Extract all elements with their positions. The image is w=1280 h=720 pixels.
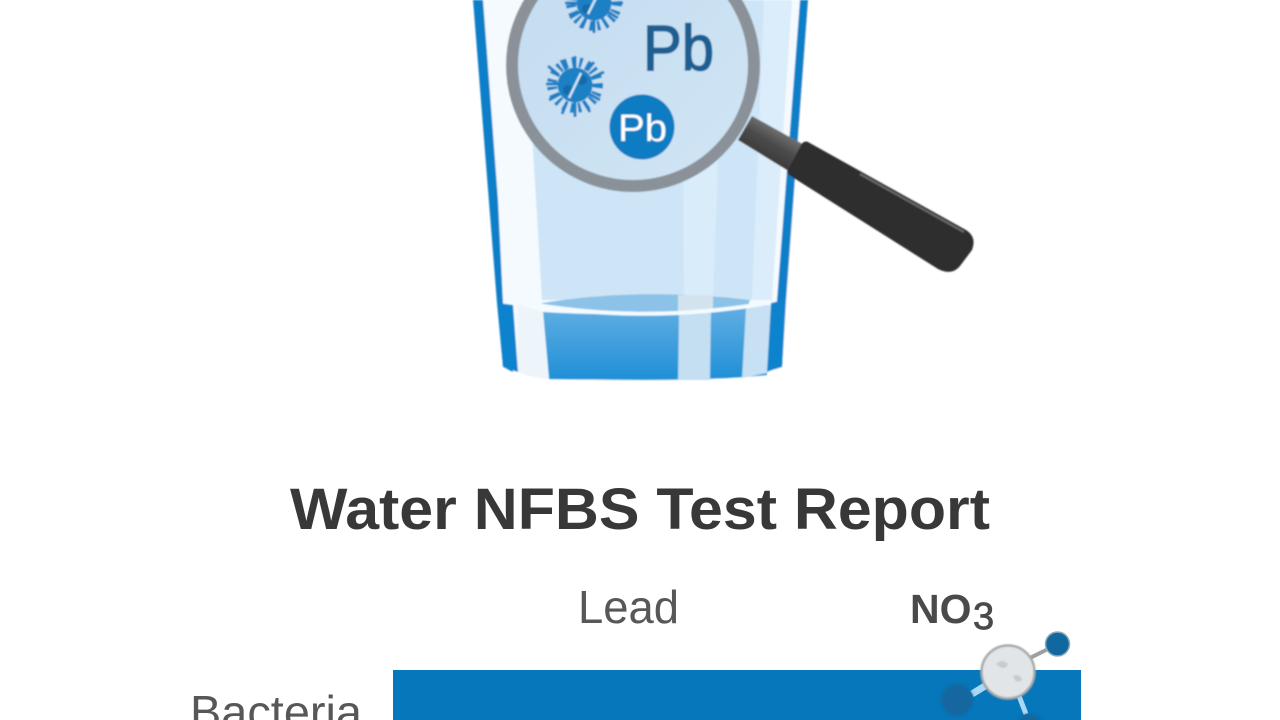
label: NO3: 3	[973, 596, 994, 638]
water surface	[542, 294, 750, 312]
illustration: glass of water with magnifying glass	[473, 0, 974, 381]
icon: bacterium upper	[565, 0, 623, 33]
left glass edge	[473, 0, 513, 372]
lens contents: Pb symbol dark: Pb	[643, 12, 714, 84]
central atom	[982, 646, 1034, 698]
icon: NO3 molecule	[941, 632, 1070, 720]
handle grip	[788, 142, 974, 272]
right glass edge	[772, 0, 808, 370]
handle sheen	[860, 174, 964, 232]
icon: bacterium lower	[546, 56, 604, 117]
label: NO3	[910, 586, 994, 638]
water body	[543, 305, 767, 380]
label: NO3: NO	[910, 586, 972, 632]
glass	[473, 0, 808, 381]
label: Lead: Lead	[578, 581, 679, 633]
glass highlight stripes	[682, 0, 724, 300]
bar chart: bar	[393, 670, 1081, 720]
bonds	[1030, 648, 1050, 658]
top right atom	[1046, 632, 1070, 656]
glass inner tint	[524, 0, 792, 300]
icon: Pb circle: Pb	[618, 108, 667, 150]
left atom	[941, 684, 973, 716]
icon: Pb circle	[610, 94, 674, 160]
title: Water NFBS Test Report	[290, 477, 990, 542]
glass body	[473, 0, 808, 381]
water edge blue	[498, 303, 518, 372]
magnifying glass	[512, 0, 974, 272]
bottom atom	[1016, 714, 1044, 720]
handle connector	[738, 116, 806, 172]
water pale stripes	[678, 311, 711, 380]
water surface line	[520, 302, 768, 314]
lens	[512, 0, 754, 186]
